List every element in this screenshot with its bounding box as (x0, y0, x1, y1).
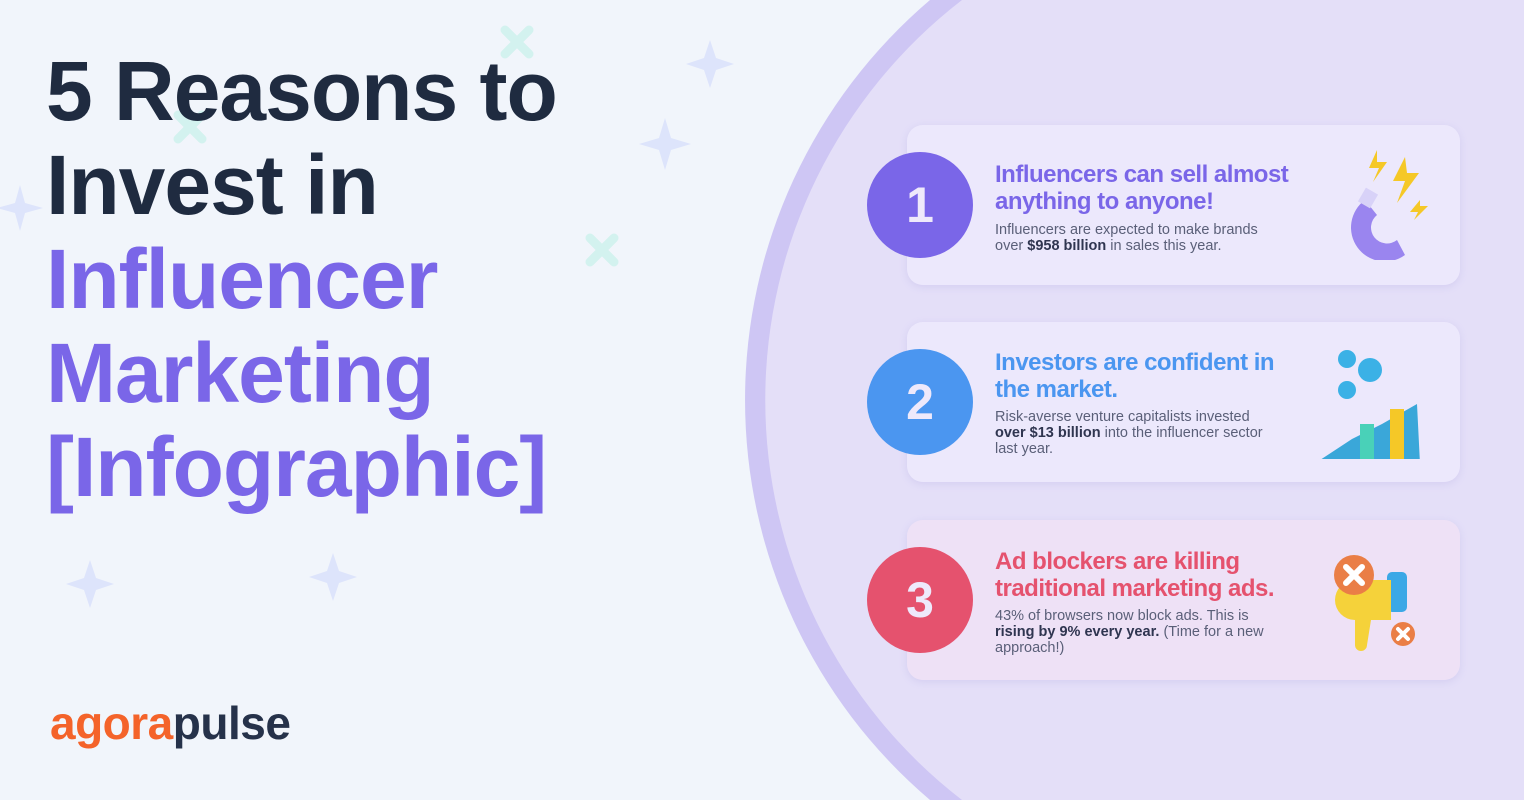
icon: chart with coins (1322, 350, 1420, 459)
text 3 (995, 608, 1264, 656)
icon: thumbs down (1334, 555, 1415, 651)
heading 1: anything to anyone! (995, 188, 1214, 215)
heading 3: traditional marketing ads. (995, 575, 1274, 602)
number badge 3: 3 (906, 572, 934, 628)
heading 3: Ad blockers are killing (995, 548, 1240, 575)
text 3: 43% of browsers now block ads. This is (995, 608, 1249, 624)
text 2: last year. (995, 441, 1053, 457)
text 3: rising by 9% every year. (Time for a new (995, 624, 1264, 640)
card 3 (907, 520, 1460, 680)
title: [Infographic] (46, 420, 546, 514)
card 2 (907, 322, 1460, 482)
title (46, 44, 557, 514)
number badge 1 (867, 152, 973, 258)
card 1 (907, 125, 1460, 285)
heading 2 (995, 349, 1274, 403)
decorative sparkles (0, 26, 734, 608)
number badge 2: 2 (906, 374, 934, 430)
text 2: Risk-averse venture capitalists invested (995, 409, 1250, 425)
heading 2: the market. (995, 376, 1118, 403)
heading 3 (995, 548, 1274, 602)
number badge 3 (867, 547, 973, 653)
title: Invest in (46, 138, 378, 232)
text 2 (995, 409, 1263, 457)
number badge 2 (867, 349, 973, 455)
text 1: over $958 billion in sales this year. (995, 238, 1221, 254)
text 2: over $13 billion into the influencer sector (995, 425, 1263, 441)
heading 2: Investors are confident in (995, 349, 1274, 376)
number badge 1: 1 (906, 177, 934, 233)
logo: agorapulse: agorapulse (50, 697, 290, 749)
title: Influencer (46, 232, 437, 326)
heading 1 (995, 161, 1288, 215)
text 1: Influencers are expected to make brands (995, 222, 1258, 238)
text 1 (995, 222, 1258, 254)
text 3: approach!) (995, 640, 1064, 656)
title: 5 Reasons to (46, 44, 557, 138)
title: Marketing (46, 326, 434, 420)
heading 1: Influencers can sell almost (995, 161, 1288, 188)
icon: magnet (1351, 150, 1428, 260)
